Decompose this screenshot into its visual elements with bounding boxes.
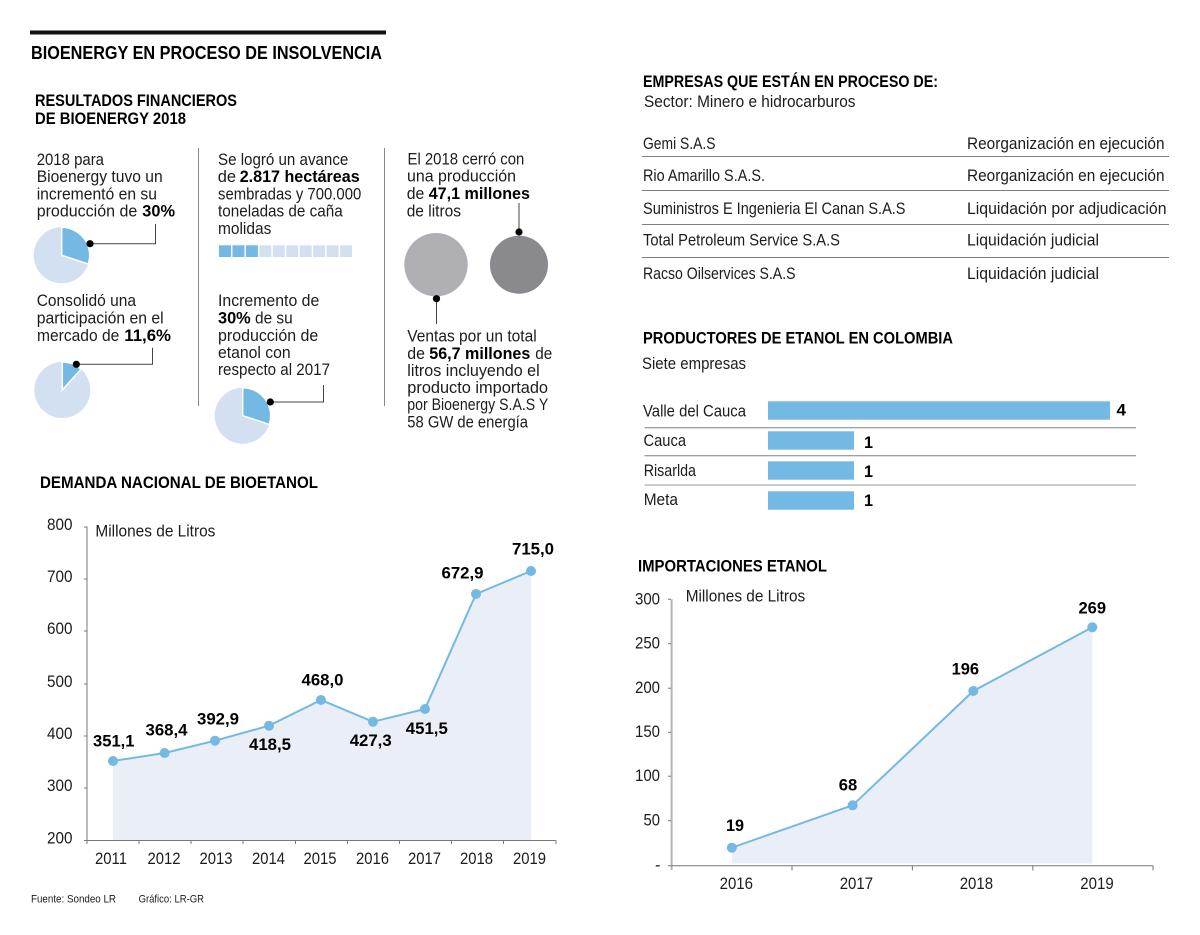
panel: empresas en proceso (642, 72, 1169, 283)
line chart: importaciones: 68 (839, 776, 857, 795)
heading: resultados financieros: DE BIOENERGY 2018 (35, 110, 186, 128)
line chart: demanda: 2013 (200, 850, 232, 868)
line chart: demanda: 392,9 (197, 710, 239, 729)
line chart: demanda: 2014 (252, 850, 285, 868)
bar chart: productores: Risarlda (644, 462, 697, 480)
line chart: demanda: 468,0 (302, 671, 344, 690)
title block: BIOENERGY EN PROCESO DE INSOLVENCIA (31, 43, 382, 63)
text: ventas 56,7 millones: de (407, 345, 425, 363)
text: ventas 56,7 millones: de (535, 345, 552, 363)
bar chart: productores: Cauca (644, 432, 687, 450)
pie chart: 11,6% mercado (34, 348, 152, 418)
table: empresas: Liquidación por adjudicación (967, 200, 1166, 218)
line chart: demanda: 672,9 (442, 564, 484, 583)
line chart: importaciones: 200 (635, 679, 660, 697)
line chart: importaciones: 150 (635, 723, 660, 741)
pie chart: 30% etanol (215, 385, 324, 444)
text: incremento producción 30%: producción de (37, 202, 137, 220)
heading: importaciones: IMPORTACIONES ETANOL (638, 558, 827, 576)
source note (31, 894, 204, 906)
text: ventas 56,7 millones: litros incluyendo el (407, 362, 540, 380)
bar chart: productores: 1 (864, 491, 873, 510)
heading: resultados financieros (35, 92, 237, 128)
text: incremento producción 30% (37, 151, 175, 220)
line chart: demanda: 2019 (513, 850, 546, 868)
text: producción 47,1 millones: una producción (407, 168, 516, 186)
icon: progress squares (219, 245, 352, 257)
text: producción 47,1 millones: 47,1 millones (429, 185, 530, 203)
text: producción 47,1 millones: El 2018 cerró con (408, 150, 524, 168)
subheading: sector: Sector: Minero e hidrocarburos (644, 93, 856, 111)
line chart: importaciones: - (655, 856, 660, 874)
line chart: demanda: 2016 (356, 850, 389, 868)
pie chart: 30% producción (34, 224, 156, 283)
text: ventas 56,7 millones: 58 GW de energía (407, 414, 529, 432)
bar chart: productores: Meta (644, 491, 679, 509)
line chart: importaciones: 269 (1078, 599, 1106, 618)
text: participación de mercado 11,6%: participación en el (37, 310, 164, 328)
line chart: demanda: 427,3 (350, 731, 392, 750)
source note: Gráfico: LR-GR (139, 894, 204, 906)
text: ventas 56,7 millones: Ventas por un total (407, 328, 537, 346)
text: avance hectáreas: sembradas y 700.000 (218, 186, 361, 204)
text: incremento etanol: 30% (218, 310, 251, 328)
line chart: demanda: 351,1 (93, 732, 134, 751)
text: incremento producción 30%: Bioenergy tuvo un (37, 168, 163, 186)
text: incremento etanol: Incremento de (218, 292, 319, 310)
text: producción 47,1 millones: de (407, 185, 424, 203)
text: participación de mercado 11,6%: mercado de (37, 327, 119, 345)
heading: demanda nacional: DEMANDA NACIONAL DE BIOETANOL (40, 474, 318, 492)
panel: productores de etanol (642, 330, 1136, 510)
title block (30, 30, 386, 63)
table: empresas: Liquidación judicial (967, 265, 1099, 283)
bar chart: productores: 1 (864, 433, 873, 452)
bar chart: productores: 1 (864, 462, 873, 481)
line chart: demanda: 2018 (460, 850, 493, 868)
line chart: demanda: 300 (47, 777, 72, 795)
text: avance hectáreas (218, 151, 361, 238)
text: incremento etanol: etanol con (218, 344, 291, 362)
line chart: demanda: 2012 (148, 850, 180, 868)
text: incremento etanol (218, 292, 330, 379)
text: avance hectáreas: toneladas de caña (218, 202, 343, 220)
heading: productores: PRODUCTORES DE ETANOL EN COLOMBIA (643, 330, 953, 348)
bar chart: productores: Valle del Cauca (643, 403, 747, 421)
text: avance hectáreas: molidas (218, 220, 271, 238)
text: avance hectáreas: de (218, 168, 236, 186)
text: producción 47,1 millones (407, 150, 530, 221)
table: empresas: Liquidación judicial (967, 232, 1099, 250)
line chart: demanda: 700 (47, 568, 72, 586)
line chart: demanda: 451,5 (406, 719, 448, 738)
text: incremento etanol: producción de (218, 327, 318, 345)
text: ventas 56,7 millones: producto importado (407, 379, 548, 397)
line chart: importaciones: Millones de Litros (686, 588, 805, 606)
line chart: demanda: 800 (47, 516, 72, 534)
line chart: importaciones: 196 (952, 660, 979, 679)
line chart: demanda: 715,0 (512, 540, 554, 559)
table: empresas: Suministros E Ingenieria El Canan S.A.S (643, 200, 906, 218)
line chart: demanda (47, 516, 556, 868)
text: participación de mercado 11,6%: 11,6% (124, 327, 171, 345)
heading: resultados financieros: RESULTADOS FINANCIEROS (35, 92, 237, 110)
text: participación de mercado 11,6% (37, 292, 171, 345)
line chart: demanda: 2015 (304, 850, 336, 868)
panel: importaciones etanol (635, 558, 1153, 893)
line chart: demanda: 600 (47, 620, 72, 638)
table: empresas: Racso Oilservices S.A.S (643, 265, 796, 283)
text: producción 47,1 millones: de litros (407, 203, 461, 221)
line chart: importaciones: 100 (635, 767, 660, 785)
text: ventas 56,7 millones (407, 328, 552, 432)
line chart: importaciones: 19 (726, 816, 744, 835)
line chart: importaciones: 50 (644, 812, 660, 830)
panel: demanda nacional de bioetanol (40, 474, 556, 868)
table: empresas: Gemi S.A.S (643, 135, 716, 153)
text: incremento etanol: respecto al 2017 (218, 361, 330, 379)
line chart: importaciones: 300 (635, 590, 660, 608)
table: empresas (642, 135, 1169, 283)
text: incremento producción 30%: 30% (142, 202, 175, 220)
line chart: importaciones: 2016 (720, 875, 753, 893)
bar chart: productores: 4 (1116, 401, 1127, 420)
icon: circle producción (490, 203, 548, 294)
text: participación de mercado 11,6%: Consolidó una (37, 292, 137, 310)
text: avance hectáreas: 2.817 hectáreas (240, 168, 360, 186)
table: empresas: Reorganización en ejecución (967, 167, 1164, 185)
line chart: importaciones: 2017 (840, 875, 873, 893)
line chart: demanda: 200 (47, 830, 72, 848)
text: incremento producción 30%: incrementó en su (37, 186, 157, 204)
line chart: demanda: 368,4 (146, 721, 188, 740)
line chart: importaciones (635, 588, 1153, 893)
source note: Fuente: Sondeo LR (31, 894, 116, 906)
line chart: demanda: 2017 (408, 850, 441, 868)
table: empresas: Rio Amarillo S.A.S. (643, 167, 765, 185)
text: incremento producción 30%: 2018 para (37, 151, 105, 169)
table: empresas: Reorganización en ejecución (967, 135, 1164, 153)
line chart: demanda: 400 (47, 725, 72, 743)
panel: resultados financieros (34, 92, 552, 444)
line chart: demanda: 500 (47, 673, 72, 691)
text: ventas 56,7 millones: por Bioenergy S.A.S Y (407, 396, 548, 414)
table: empresas: Total Petroleum Service S.A.S (643, 232, 840, 250)
text: avance hectáreas: Se logró un avance (218, 151, 348, 169)
icon: circle ventas (404, 233, 468, 324)
line chart: demanda: 418,5 (249, 735, 291, 754)
heading: empresas: EMPRESAS QUE ESTÁN EN PROCESO DE: (643, 72, 938, 91)
line chart: demanda: Millones de Litros (95, 523, 215, 541)
text: incremento etanol: de su (255, 310, 293, 328)
line chart: importaciones: 250 (635, 635, 660, 653)
bar chart: productores (643, 401, 1136, 510)
line chart: importaciones: 2018 (960, 875, 993, 893)
line chart: importaciones: 2019 (1080, 875, 1114, 893)
line chart: demanda: 2011 (95, 850, 127, 868)
subheading: siete empresas: Siete empresas (642, 355, 746, 373)
text: ventas 56,7 millones: 56,7 millones (429, 345, 530, 363)
